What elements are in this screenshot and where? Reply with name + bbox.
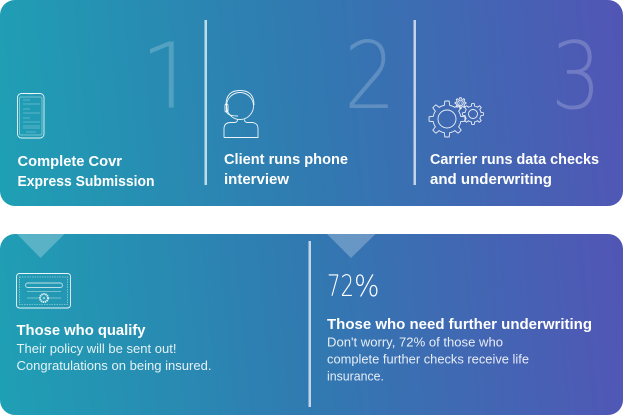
pointer: those who qualify [17,234,64,258]
step number 3: 3 [551,23,601,131]
step number 2: 2 [344,22,396,130]
text: those who need further underwriting: Those who need further underwriting [327,317,592,333]
panel: outcomes [0,234,623,415]
step 2 label: interview [224,172,290,188]
text: those who need further underwriting [327,317,592,384]
text: those who qualify: Their policy will be sent out! [16,342,176,356]
divider: step 1 and 2 [204,20,207,185]
panel: three process steps [0,0,623,206]
statistic: 72%: % [354,269,380,303]
step 3 label: and underwriting [430,172,552,188]
text: those who qualify: Congratulations on being insured. [16,359,212,373]
text: those who qualify [16,323,212,373]
statistic: 72%: 72 [327,269,354,303]
step number 1: 1 [138,23,201,137]
pointer: further underwriting [327,234,376,258]
icon: insurance certificate [16,274,70,308]
text: those who need further underwriting: complete further checks receive life [327,352,529,366]
text: those who need further underwriting: Don't worry, 72% of those who [327,336,503,350]
step 2 label: Client runs phone [224,152,348,168]
step 2 label [224,152,348,188]
step 1 label: Express Submission [18,174,154,190]
icon: phone with form [18,94,44,138]
step 1 label: Complete Covr [18,154,122,170]
text: those who qualify: Those who qualify [16,323,146,339]
step 3 label [430,152,599,188]
step 3 label: Carrier runs data checks [430,152,599,168]
step 1 label [18,154,154,190]
divider: outcomes [308,241,311,407]
text: those who need further underwriting: insurance. [327,370,384,384]
icon: gears [429,98,483,137]
divider: step 2 and 3 [414,20,416,185]
icon: person with headset [224,90,258,138]
